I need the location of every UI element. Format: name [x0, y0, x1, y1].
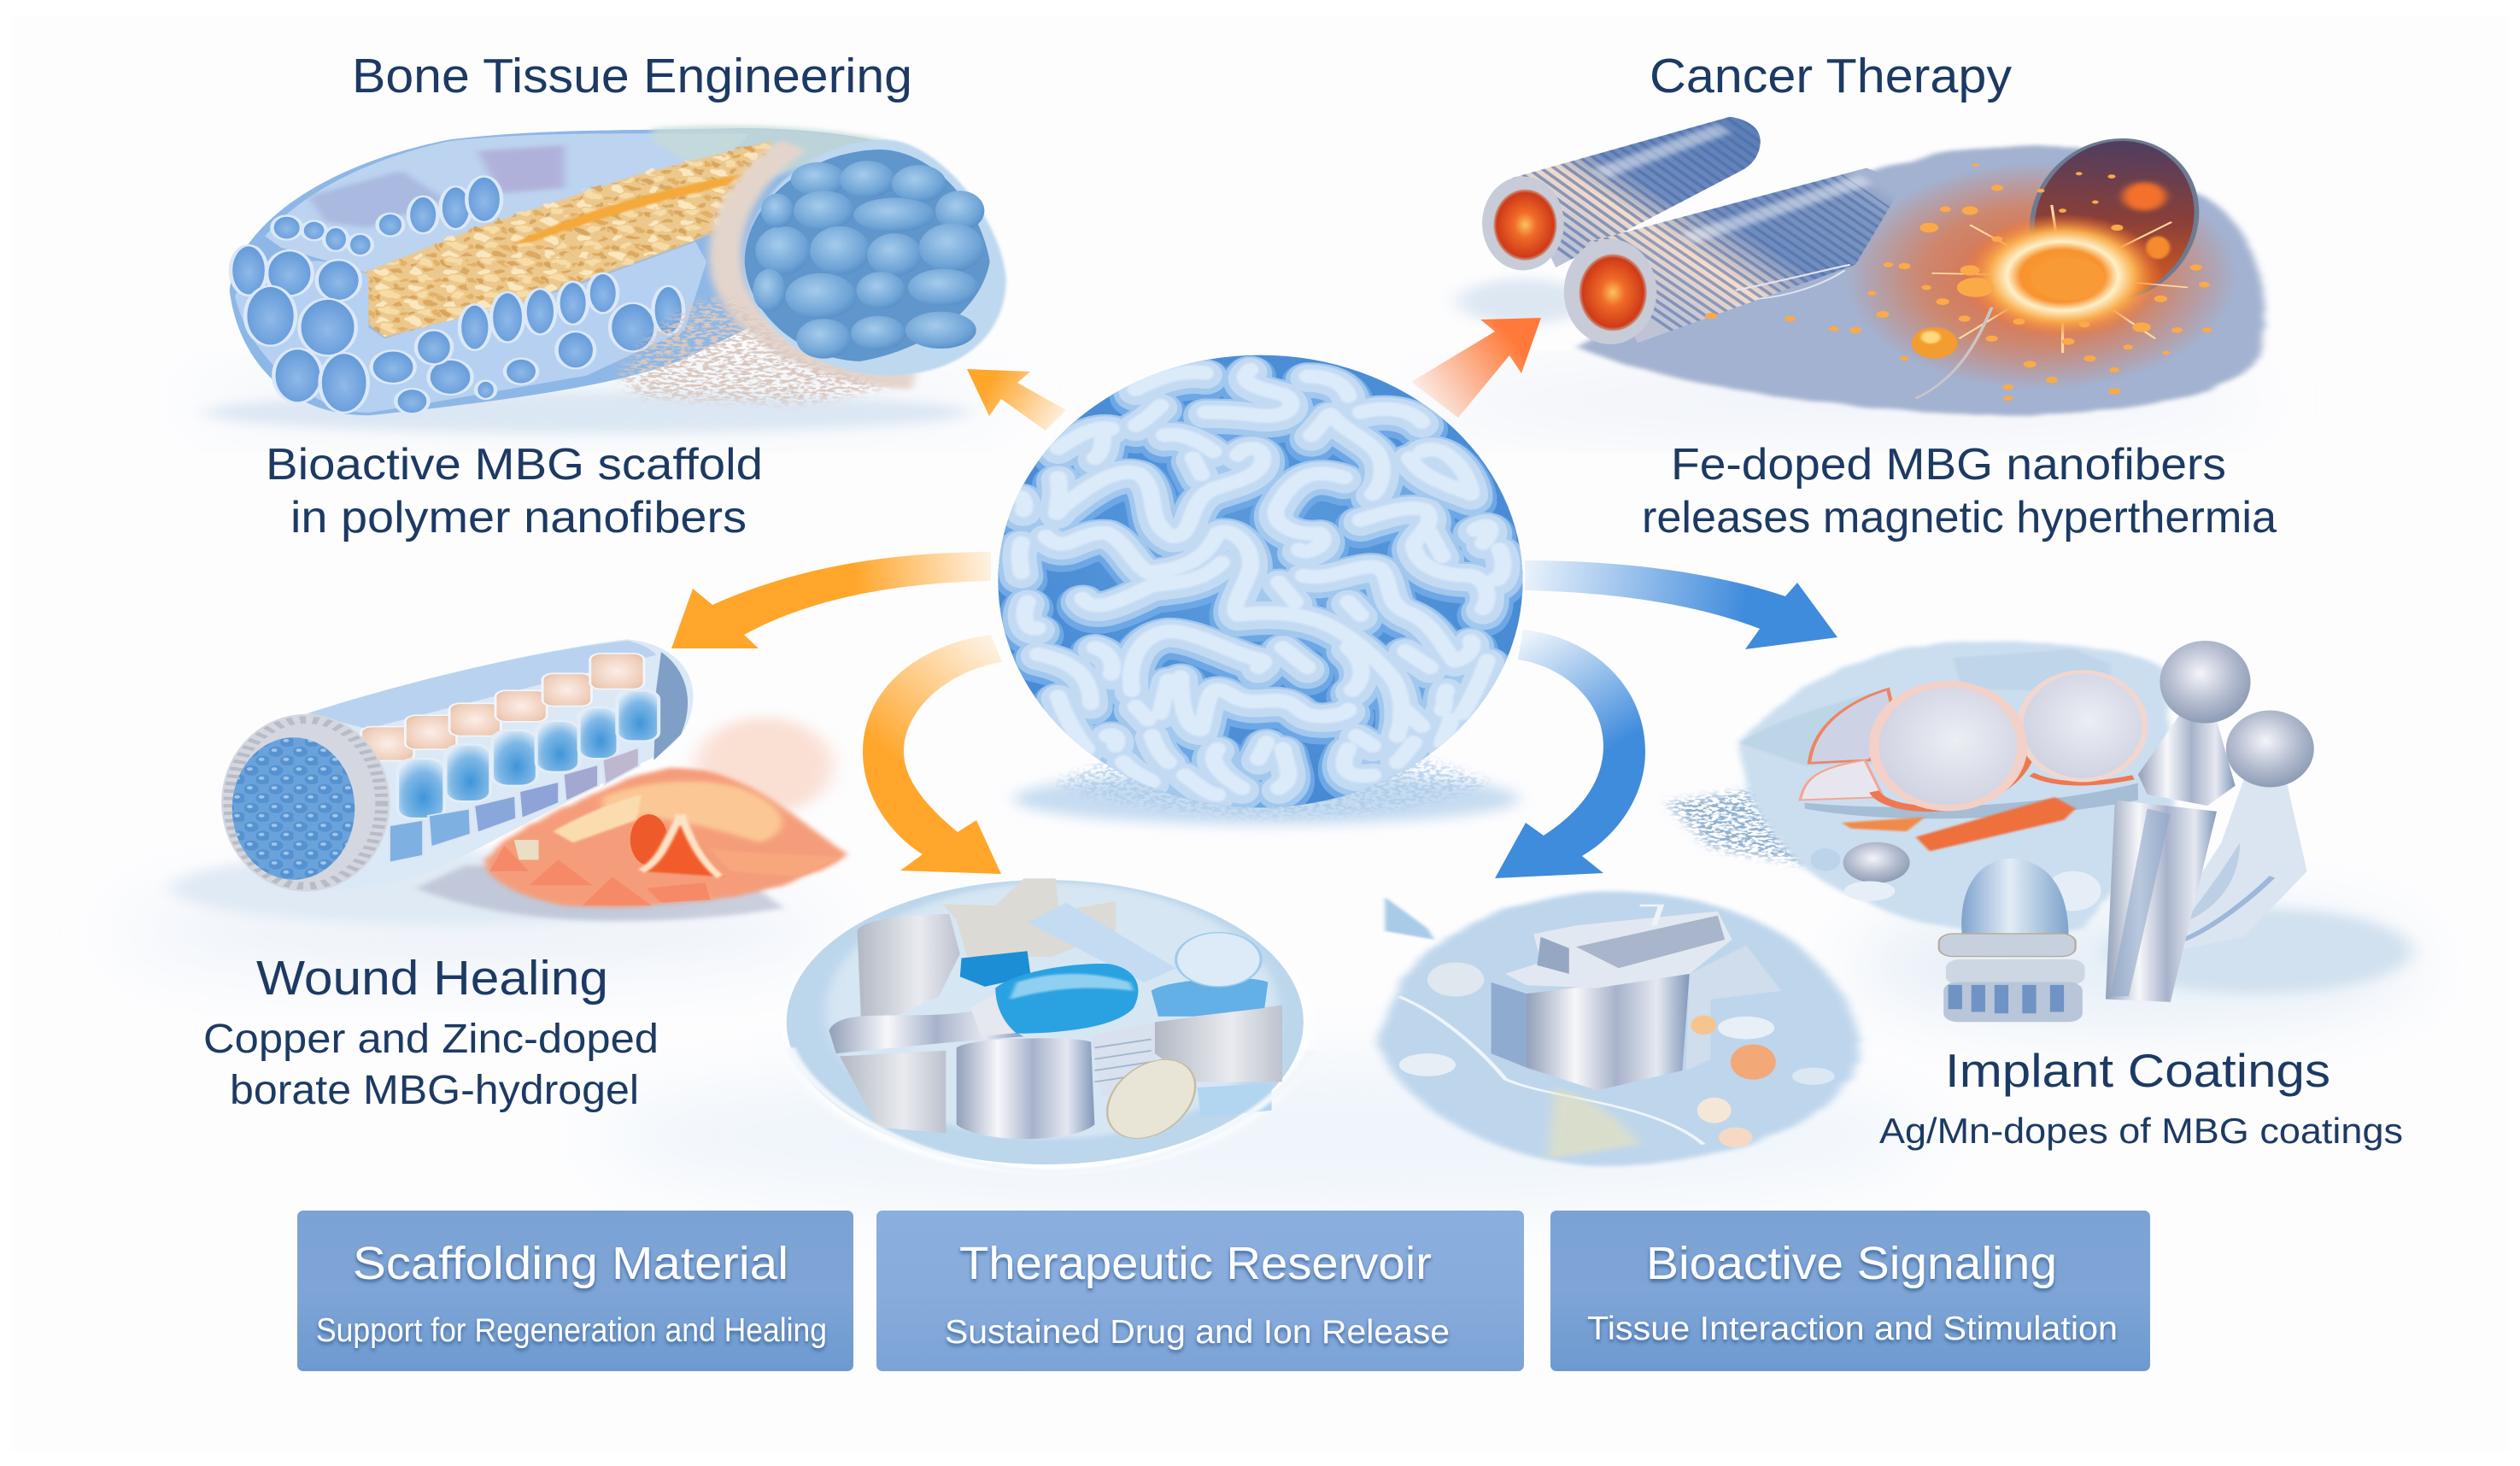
panel: Bioactive Signaling	[1550, 1211, 2150, 1371]
speckled collar	[725, 145, 913, 381]
arrow: to therapeutic reservoir (orange)	[863, 635, 1002, 874]
heading: Bone Tissue Engineering: Bone Tissue Engineering	[352, 49, 912, 103]
wound tissue	[484, 769, 847, 908]
panel: Therapeutic Reservoir: Sustained Drug and Ion Release	[945, 1314, 1450, 1351]
text: cancer caption	[1642, 440, 2277, 542]
panel: Scaffolding Material: Support for Regeneration and Healing	[316, 1312, 827, 1349]
nanofiber back	[1482, 117, 1763, 270]
panel: Bioactive Signaling: Bioactive Signaling	[1646, 1238, 2057, 1289]
panel: Scaffolding Material: Scaffolding Material	[353, 1238, 788, 1289]
panel: Therapeutic Reservoir: Therapeutic Reservoir	[959, 1238, 1432, 1289]
central mesoporous bioactive glass sphere	[998, 355, 1523, 825]
text: cancer caption: Fe-doped MBG nanofibers	[1671, 440, 2226, 490]
illustration: bioactive device	[1378, 891, 1860, 1167]
text: wound healing caption: borate MBG-hydrogel	[230, 1068, 639, 1113]
heading: Wound Healing: Wound Healing	[256, 951, 608, 1006]
text: bone scaffold caption: in polymer nanofibers	[290, 493, 747, 542]
arrow: to wound healing	[671, 552, 991, 648]
arrow: to bone tissue engineering	[967, 369, 1066, 431]
text: cancer caption: releases magnetic hyperthermia	[1642, 493, 2277, 542]
nanofiber front	[1564, 168, 1905, 344]
panel: Scaffolding Material	[297, 1211, 853, 1371]
spherical-head pin back	[2175, 711, 2314, 951]
illustration: implant coatings	[1666, 641, 2412, 1022]
spherical-head pin front	[2106, 641, 2251, 1002]
ground haze	[120, 376, 2417, 1213]
hydrogel cylinder	[303, 639, 694, 889]
dome implant	[1939, 859, 2085, 1022]
heading: Implant Coatings: Implant Coatings	[1945, 1044, 2330, 1097]
arrow: to bioactive device (blue)	[1495, 630, 1645, 878]
heading: Cancer Therapy: Cancer Therapy	[1650, 49, 2013, 103]
illustration: bone scaffold	[205, 126, 1006, 432]
illustration: therapeutic reservoir pills	[787, 878, 1310, 1173]
arrow: to cancer therapy	[1411, 318, 1541, 418]
illustration: wound healing hydrogel	[171, 639, 847, 925]
panel: Bioactive Signaling: Tissue Interaction and Stimulation	[1587, 1311, 2118, 1347]
text: bone scaffold caption: Bioactive MBG scaffold	[266, 440, 763, 490]
text: implant coatings caption: Ag/Mn-dopes of MBG coatings	[1879, 1111, 2403, 1151]
text: wound healing caption	[203, 1017, 659, 1113]
text: bone scaffold caption	[266, 440, 763, 542]
illustration: magnetic nanofibers and hyperthermia burst	[1457, 117, 2265, 415]
arrow: to implant coatings	[1525, 560, 1837, 649]
panel: Therapeutic Reservoir	[876, 1211, 1524, 1371]
text: wound healing caption: Copper and Zinc-doped	[203, 1017, 659, 1062]
